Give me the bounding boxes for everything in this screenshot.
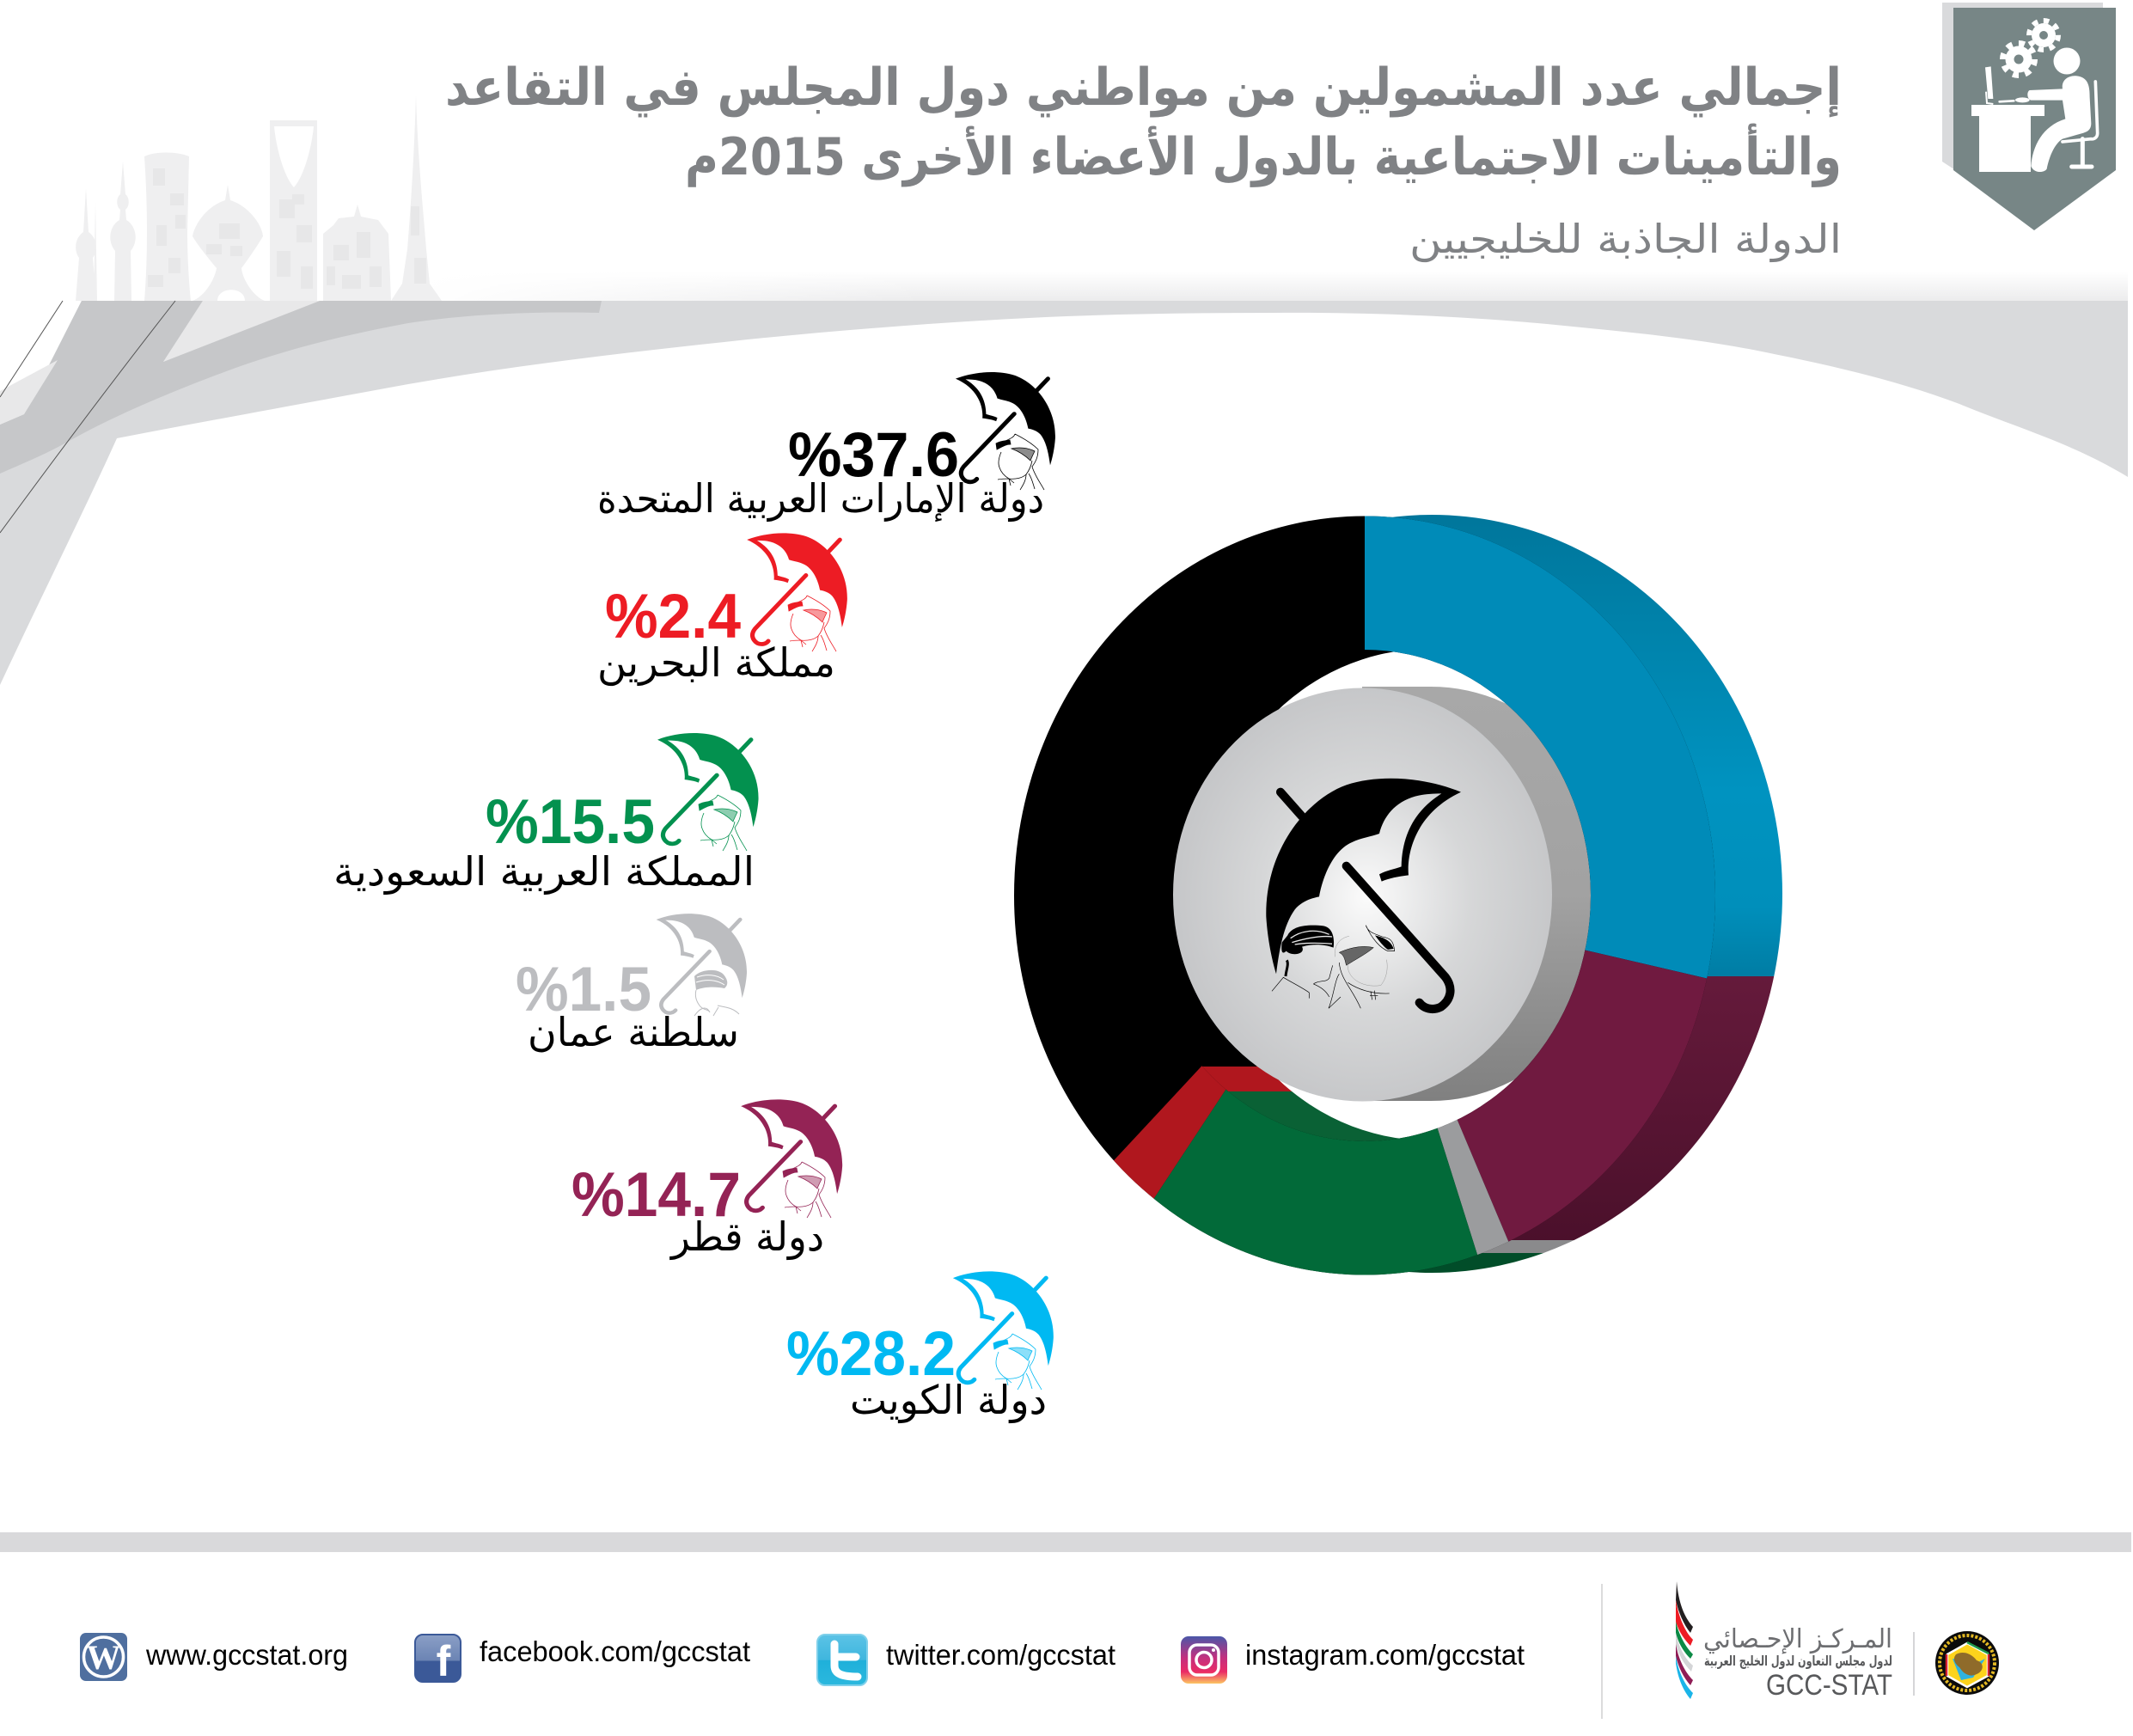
twitter link: twitter.com/gccstat	[886, 1639, 1115, 1671]
logo divider	[1913, 1632, 1915, 1696]
Oman umbrella	[657, 914, 747, 1016]
Oman name: سلطنة عمان	[528, 1009, 739, 1055]
UAE entry	[597, 372, 1055, 523]
website link: www.gccstat.org	[145, 1639, 348, 1671]
Qatar name: دولة قطر	[669, 1213, 824, 1261]
twitter link	[817, 1635, 1115, 1685]
Bahrain entry	[597, 533, 847, 687]
icon: facebook: f	[437, 1637, 451, 1685]
instagram link: instagram.com/gccstat	[1245, 1639, 1525, 1671]
title: والتأمينات الاجتماعية بالدول الأعضاء الأخرى 2015م	[685, 123, 1842, 187]
center disc face	[1173, 688, 1552, 1102]
footer divider	[1601, 1584, 1603, 1719]
GCC emblem	[1935, 1631, 1999, 1695]
footer bar	[0, 1532, 2131, 1552]
ring side: Saudi	[1409, 1253, 1543, 1273]
slice: Saudi green	[1153, 1090, 1477, 1275]
center disc side	[1362, 687, 1591, 1101]
ring side: Oman	[1482, 1240, 1574, 1253]
title: إجمالي عدد المشمولين من مواطني دول المجلس في التقاعد	[445, 58, 1842, 118]
Bahrain percentage: %2.4	[605, 582, 741, 651]
Qatar entry	[571, 1099, 842, 1261]
Saudi percentage: %15.5	[486, 787, 655, 857]
Kuwait umbrella	[953, 1271, 1054, 1390]
background swoosh light band	[0, 301, 2128, 685]
Qatar percentage: %14.7	[571, 1160, 741, 1230]
website link	[80, 1633, 348, 1681]
skyline of gulf landmarks	[76, 95, 442, 306]
thin swoosh lines	[0, 301, 175, 533]
logo Arabic name: المـركـز الإحـصائي	[1703, 1624, 1892, 1654]
Saudi umbrella	[657, 733, 759, 851]
icon: instagram	[1181, 1636, 1227, 1684]
Oman entry	[516, 914, 747, 1055]
Kuwait name: دولة الكويت	[850, 1377, 1047, 1424]
icon: twitter	[817, 1635, 867, 1685]
Bahrain name: مملكة البحرين	[597, 639, 835, 687]
slice: UAE black	[1014, 516, 1715, 1275]
title	[445, 58, 1842, 187]
Oman percentage: %1.5	[516, 955, 651, 1024]
Saudi name: المملكة العربية السعودية	[333, 848, 755, 896]
Kuwait percentage: %28.2	[786, 1319, 956, 1389]
Kuwait entry	[786, 1271, 1054, 1424]
donut chart 3D	[1014, 515, 1782, 1275]
UAE percentage: %37.6	[788, 420, 959, 490]
UAE name: دولة الإمارات العربية المتحدة	[597, 475, 1044, 523]
inner wall and hole	[1139, 650, 1591, 1141]
logo Arabic subtitle: لدول مجلس التعاون لدول الخليج العربية	[1704, 1653, 1892, 1669]
background swoosh pale facets	[0, 301, 320, 425]
ring side: Qatar	[1512, 976, 1774, 1240]
UAE umbrella	[956, 372, 1055, 490]
slice: Bahrain red	[1114, 1066, 1225, 1199]
logo ribbon	[1676, 1581, 1693, 1699]
header gradient strip	[413, 272, 2128, 301]
icon: wordpress	[80, 1633, 127, 1681]
slice: Oman gray	[1437, 1120, 1509, 1255]
badge icon: person at desk with gears	[1942, 3, 2116, 230]
icon: facebook	[415, 1635, 461, 1685]
Saudi entry	[333, 733, 759, 896]
center umbrella icon	[1266, 779, 1461, 1009]
Qatar umbrella	[741, 1099, 842, 1218]
icon: wordpress: W	[86, 1638, 120, 1677]
instagram link	[1181, 1636, 1525, 1684]
logo wordmark: GCC-STAT	[1766, 1669, 1892, 1702]
facebook link	[415, 1635, 750, 1685]
slice: Kuwait blue	[1365, 516, 1715, 978]
ring side: Kuwait	[1391, 515, 1782, 976]
background swoosh dark band	[0, 301, 602, 474]
facebook link: facebook.com/gccstat	[480, 1635, 750, 1667]
slice: Qatar purple	[1458, 951, 1707, 1241]
Bahrain umbrella	[747, 533, 847, 651]
GCC-STAT logo	[1676, 1581, 1892, 1702]
subtitle: الدولة الجاذبة للخليجيين	[1409, 216, 1842, 263]
